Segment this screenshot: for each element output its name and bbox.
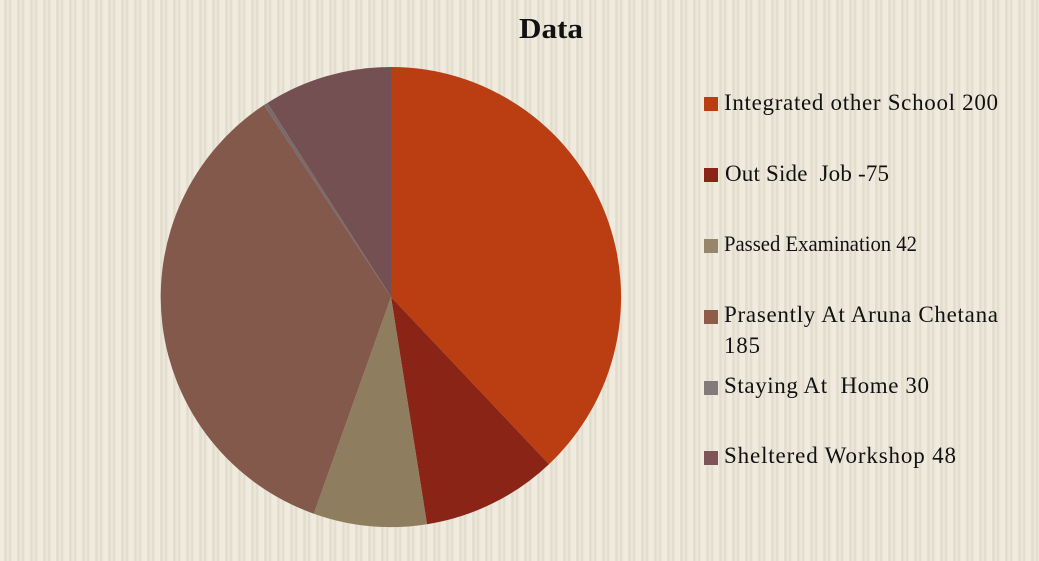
pie chart (161, 67, 621, 527)
slice: Prasently At Aruna Chetana 185 (161, 105, 391, 514)
slice: Out Side Job 75 (391, 297, 549, 524)
legend item: Prasently At Aruna Chetana (704, 302, 998, 358)
legend item: Prasently At Aruna Chetana: Prasently At Aruna Chetana (724, 302, 998, 327)
title: Data (519, 14, 583, 45)
legend item: Out Side Job: Out Side Job -75 (725, 161, 889, 186)
slice: Sheltered Workshop 48 (267, 67, 391, 297)
slice: Integrated other School 200 (391, 67, 621, 464)
legend (704, 90, 998, 468)
legend item: Staying At Home: Staying At Home 30 (724, 373, 929, 398)
legend item: Prasently At Aruna Chetana: 185 (724, 333, 760, 358)
slice: Passed Examination 42 (314, 297, 427, 527)
legend item: Passed Examination: Passed Examination 42 (724, 231, 917, 256)
legend item: Integrated other School: Integrated other School 200 (724, 90, 998, 115)
legend item: Sheltered Workshop: Sheltered Workshop 48 (724, 443, 956, 468)
slice: Staying At Home 30 (264, 103, 391, 297)
